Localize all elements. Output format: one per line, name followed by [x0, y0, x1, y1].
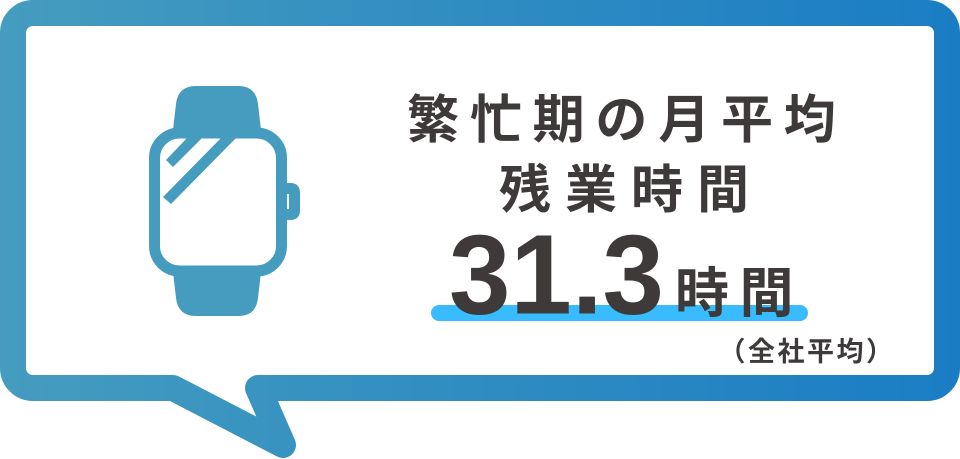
note: company average: （全社平均） [718, 337, 896, 367]
heading line 2: 残業時間 [499, 162, 763, 220]
heading line 1: 繁忙期の月平均 [407, 92, 847, 150]
big number: 31.3 [449, 212, 664, 338]
unit: hours: 時間 [675, 264, 804, 324]
highlight underline [431, 305, 808, 321]
icon: smartwatch [154, 86, 300, 316]
